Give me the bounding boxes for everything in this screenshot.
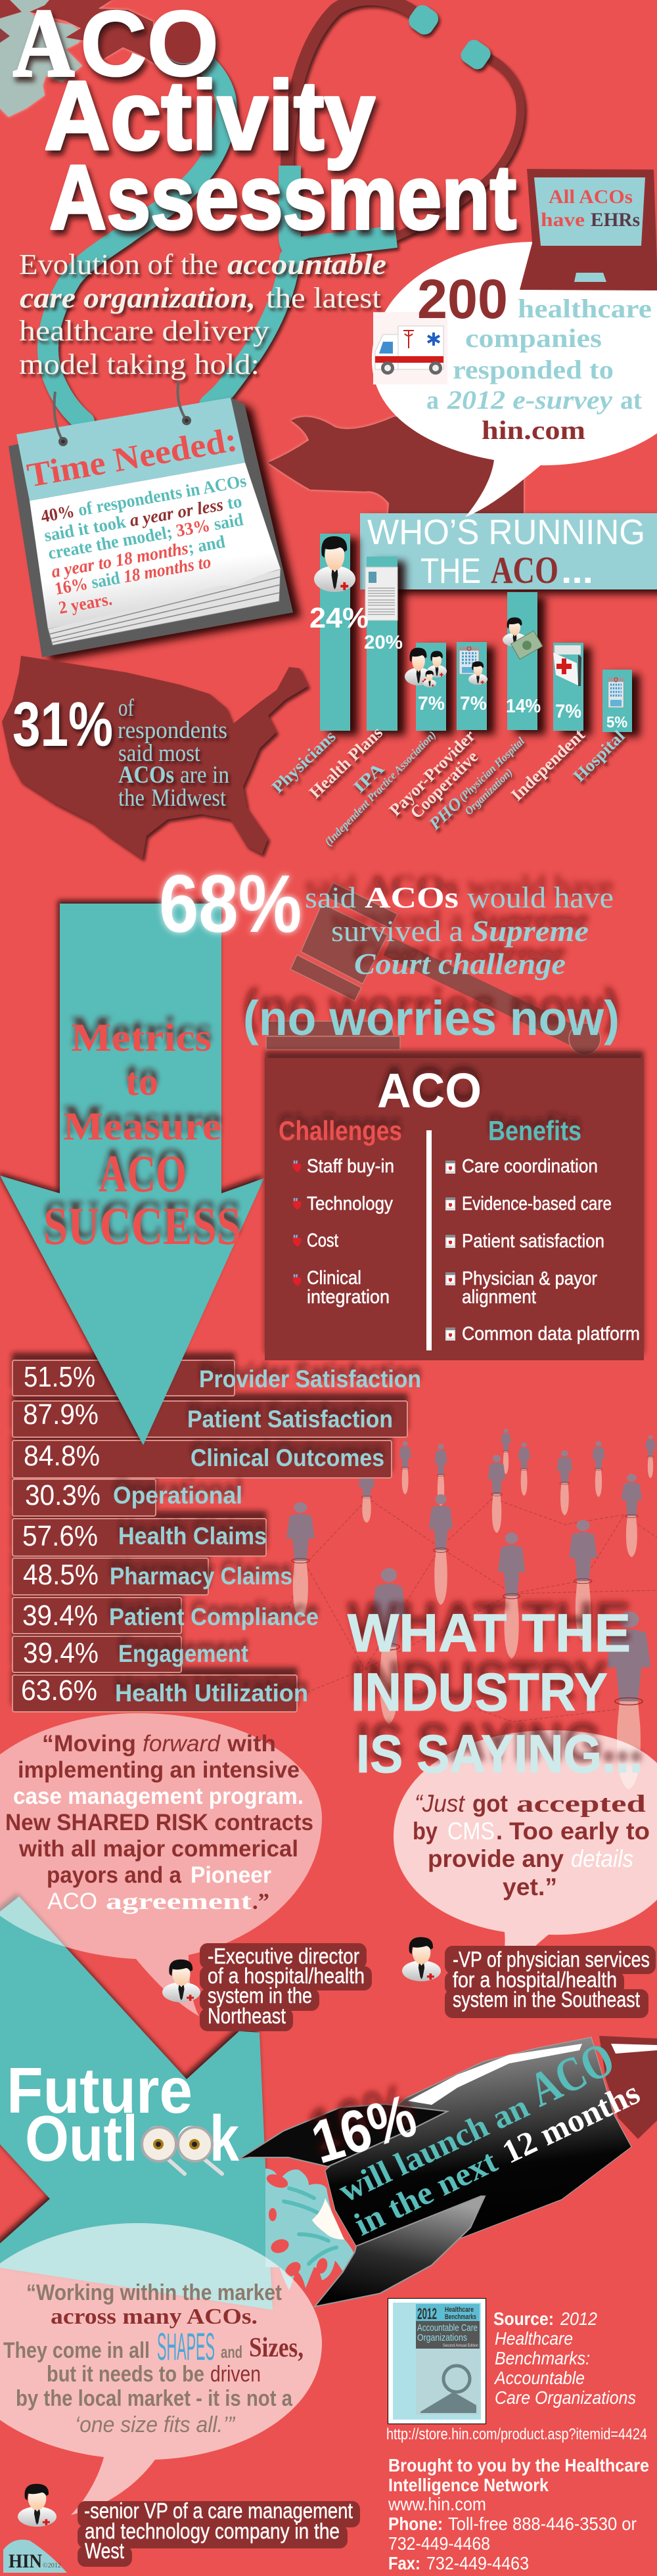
stat text: survived a xyxy=(331,914,463,948)
logo: HIN: ©2012 xyxy=(43,2562,61,2569)
map text: of xyxy=(118,695,135,722)
rocket flame xyxy=(265,2169,355,2290)
contact block: Fax: xyxy=(388,2553,420,2573)
arrow text: Measure xyxy=(63,1105,221,1148)
quote text: “Just xyxy=(415,1790,466,1817)
attribution: VP physician services: for a hospital/health xyxy=(453,1967,617,1992)
arrow text xyxy=(43,1016,241,1256)
quote text: “Working within the market xyxy=(26,2280,282,2305)
laptop: all ACOs have EHRs: All ACOs xyxy=(549,186,633,208)
bar labels: (Independent Practice Association) xyxy=(322,729,438,848)
bubble text: companies xyxy=(465,323,602,353)
report cover: Accountable Care xyxy=(417,2322,478,2334)
title: Assessment xyxy=(49,147,516,248)
arrow text: ACO xyxy=(99,1145,187,1203)
calendar body text: 2 years. xyxy=(57,589,114,618)
icons xyxy=(314,536,623,708)
stethoscope xyxy=(48,0,520,422)
rocket text: 12 months xyxy=(497,2074,645,2171)
source text: Source: xyxy=(493,2309,554,2329)
logo: HIN xyxy=(3,2540,67,2573)
stat text: ACOs xyxy=(365,881,459,914)
laptop: all ACOs have EHRs xyxy=(520,169,657,290)
quote text: ACO xyxy=(47,1889,97,1914)
bar labels xyxy=(268,723,629,848)
percentage values: 5% xyxy=(606,714,627,731)
challenges column: Staff buy-in xyxy=(307,1156,394,1177)
calendar: time needed xyxy=(9,381,293,657)
bar labels: (Physician Hospital xyxy=(457,735,527,804)
future outlook heading: Outl xyxy=(25,2102,138,2174)
map text: said most xyxy=(118,740,201,767)
quote bubble: senior VP xyxy=(0,2223,322,2515)
challenges column: integration xyxy=(307,1287,390,1308)
icon: magnifier eyes xyxy=(142,2127,222,2174)
attribution: senior VP xyxy=(18,2484,360,2567)
quote text: across many ACOs. xyxy=(51,2305,258,2329)
quote bubble: VP physician services xyxy=(394,1730,657,1962)
quote text: Pioneer xyxy=(191,1862,271,1888)
rocket text: 16% xyxy=(304,2082,424,2176)
challenges column: Challenges xyxy=(279,1115,402,1146)
quote text: with all major commerical xyxy=(18,1836,298,1862)
people network xyxy=(283,1429,657,1789)
quote text: . xyxy=(496,1818,503,1845)
metric values and labels: Health Claims xyxy=(118,1523,267,1550)
quote text: details xyxy=(571,1845,633,1872)
subtitle xyxy=(19,248,386,380)
percentage values xyxy=(309,602,627,731)
rocket text: will launch an xyxy=(333,2088,534,2209)
benefits column xyxy=(445,1115,640,1345)
calendar body text: 40% of respondents in ACOs xyxy=(39,471,248,526)
quote text: Sizes, xyxy=(249,2333,304,2363)
bar labels: PHO xyxy=(424,793,466,834)
challenges column: Cost xyxy=(307,1230,338,1251)
map text: are in xyxy=(180,762,229,789)
report cover: Healthcare xyxy=(445,2306,474,2314)
bubble text: healthcare xyxy=(518,294,652,323)
bubble text: 2012 e-survey xyxy=(447,385,612,415)
quote text: “Moving xyxy=(42,1731,136,1757)
nose cone xyxy=(599,2036,657,2139)
quote text: They come in all xyxy=(3,2338,150,2363)
metric values and labels: Provider Satisfaction xyxy=(199,1366,421,1392)
benefits column: Care coordination xyxy=(462,1156,598,1177)
quote text: driven xyxy=(210,2362,261,2387)
metric values and labels: 48.5% xyxy=(23,1559,99,1591)
arrow text: to xyxy=(125,1060,158,1103)
quote text: got xyxy=(472,1790,508,1817)
challenges column xyxy=(279,1115,402,1308)
quote text: Too early to xyxy=(509,1818,650,1845)
metric values and labels: Patient Satisfaction xyxy=(187,1406,393,1433)
challenges column: Clinical xyxy=(307,1268,361,1289)
puzzle piece centre xyxy=(268,417,524,519)
metric values and labels: Health Utilization xyxy=(115,1680,308,1707)
quote text: New SHARED RISK contracts xyxy=(5,1810,313,1835)
laptop: all ACOs have EHRs: EHRs xyxy=(591,209,640,231)
quote text: accepted xyxy=(516,1791,646,1818)
benefits column: Benefits xyxy=(488,1115,581,1146)
subtitle: the latest xyxy=(266,282,381,314)
stat text xyxy=(305,881,614,980)
quote text: yet.” xyxy=(503,1874,557,1900)
contact block: www.hin.com xyxy=(388,2494,486,2514)
heading: what the industry is saying: INDUSTRY xyxy=(351,1663,608,1722)
quote text: case management program. xyxy=(13,1783,304,1809)
rocket xyxy=(238,2032,657,2307)
bubble text: a xyxy=(426,385,439,415)
map text: ACOs xyxy=(118,762,174,789)
attribution: executive director: -Executive director xyxy=(208,1944,359,1968)
attribution: senior VP: West xyxy=(85,2539,124,2563)
stat text: would have xyxy=(467,881,614,914)
subtitle: healthcare delivery xyxy=(19,315,269,347)
report cover: Organizations xyxy=(417,2332,467,2343)
contact block: 732-449-4463 xyxy=(426,2553,529,2573)
bubble text: 200 xyxy=(417,268,508,330)
calendar body text: a year to 18 months; and xyxy=(50,532,227,582)
metric values and labels: 63.6% xyxy=(21,1674,97,1707)
report cover: 2012 xyxy=(417,2305,437,2323)
report cover xyxy=(388,2299,486,2424)
source text xyxy=(493,2309,636,2408)
attribution: executive director xyxy=(162,1943,372,2031)
percentage values: 7% xyxy=(418,693,445,714)
attribution: executive director: Northeast xyxy=(208,2004,286,2028)
quote text xyxy=(5,1731,313,1914)
banner: who's running xyxy=(360,513,657,589)
bar labels: Organization) xyxy=(463,766,515,817)
quote text: agreement xyxy=(106,1889,252,1914)
subtitle: model taking hold: xyxy=(19,348,260,380)
metric values and labels: 57.6% xyxy=(22,1520,98,1552)
source text: Care Organizations xyxy=(495,2387,636,2408)
quote bubble: executive director xyxy=(0,1713,322,2016)
stat text: said xyxy=(305,881,356,914)
quote text xyxy=(413,1790,650,1900)
puzzle pieces top left xyxy=(0,0,154,117)
benefits column: Patient satisfaction xyxy=(462,1231,604,1252)
quote text: but it needs to be xyxy=(47,2362,204,2387)
map text: respondents xyxy=(118,717,227,744)
source text: Accountable xyxy=(493,2368,585,2388)
quote text xyxy=(3,2280,304,2437)
calendar body text: 16% said 18 months to xyxy=(53,552,212,599)
subtitle: Evolution of the xyxy=(19,248,218,281)
metric values and labels: 84.8% xyxy=(24,1440,100,1472)
metric values and labels: 51.5% xyxy=(24,1361,95,1393)
highlight xyxy=(408,2044,582,2105)
bar labels: Cooperative xyxy=(407,747,482,822)
map: United States xyxy=(2,656,308,859)
heading: Time Needed: xyxy=(24,421,240,495)
bar labels: Independent xyxy=(507,725,589,804)
contact block: Phone: xyxy=(388,2514,443,2534)
bar labels: Hospital xyxy=(570,726,629,785)
stat text: Supreme xyxy=(471,914,589,948)
quote text: by the local market - it is not a xyxy=(16,2386,293,2411)
subtitle: accountable xyxy=(227,248,386,281)
contact block: Intelligence Network xyxy=(388,2475,549,2495)
bubble text xyxy=(417,268,652,445)
bar labels: IPA xyxy=(350,758,388,796)
percentage values: 14% xyxy=(506,696,541,717)
metric bars xyxy=(12,1360,407,1712)
arrow: metrics to measure xyxy=(0,904,264,1445)
arrow text: Metrics xyxy=(71,1016,212,1059)
benefits column: Evidence-based care xyxy=(462,1193,612,1214)
quote text: implementing an intensive xyxy=(18,1757,300,1783)
banner heading: ... xyxy=(561,551,593,591)
metric values and labels: Pharmacy Claims xyxy=(110,1563,292,1590)
fins xyxy=(238,2104,447,2167)
metric values and labels: Operational xyxy=(113,1482,242,1509)
future outlook heading: Future xyxy=(7,2054,193,2127)
percentage values: 24% xyxy=(309,602,369,634)
metric values and labels xyxy=(21,1361,421,1707)
banner heading: THE xyxy=(420,551,481,591)
metric values and labels: Engagement xyxy=(118,1640,248,1667)
metric values and labels: 39.4% xyxy=(22,1599,98,1632)
percentage values: 7% xyxy=(555,701,581,722)
future outlook heading xyxy=(7,2054,239,2174)
attribution: senior VP: and technology company in the xyxy=(85,2519,340,2543)
bubble text: hin.com xyxy=(482,415,585,445)
contact block xyxy=(388,2455,649,2573)
metric values and labels: 39.4% xyxy=(23,1637,99,1669)
no worries: (no worries now) xyxy=(243,991,620,1046)
attribution: executive director: of a hospital/health xyxy=(208,1964,365,1988)
map text: Midwest xyxy=(151,785,227,812)
laptop: all ACOs have EHRs: have xyxy=(541,209,585,231)
calendar body text xyxy=(39,471,248,618)
contact block: 732-449-4468 xyxy=(388,2533,490,2554)
attribution: executive director: system in the xyxy=(208,1983,312,2008)
metric values and labels: Clinical Outcomes xyxy=(191,1444,384,1471)
source text: Benchmarks: xyxy=(495,2348,590,2368)
heading: what the industry is saying xyxy=(348,1603,643,1784)
stat text: Court challenge xyxy=(354,947,566,980)
68 percent supreme court stat: 68% xyxy=(159,859,302,950)
quote text: forward xyxy=(143,1731,221,1757)
bubble text: at xyxy=(620,385,643,415)
bubble text: responded to xyxy=(453,355,614,384)
banner heading: ACO xyxy=(491,549,558,591)
rocket text: ACO xyxy=(521,2032,622,2117)
metric values and labels: 87.9% xyxy=(23,1398,99,1431)
rocket text: in the next xyxy=(348,2142,503,2243)
map: United States: 31% xyxy=(12,689,113,760)
future outlook heading: k xyxy=(210,2102,239,2174)
bars xyxy=(320,534,632,732)
banner heading xyxy=(367,513,645,591)
quote text: CMS xyxy=(447,1818,495,1845)
metric values and labels: 30.3% xyxy=(25,1479,101,1511)
bar chart: who's running xyxy=(268,534,632,848)
title: Activity xyxy=(44,60,375,170)
speech bubble: 200 companies xyxy=(372,242,657,517)
quote text: and xyxy=(221,2342,242,2362)
report cover: Second Annual Edition xyxy=(443,2344,478,2348)
map text xyxy=(118,695,229,812)
attribution: senior VP: -senior VP of a care management xyxy=(84,2498,353,2523)
benefits column: alignment xyxy=(462,1287,536,1308)
challenges column: Technology xyxy=(307,1193,393,1214)
bar labels: Health Plans xyxy=(306,723,386,802)
percentage values: 7% xyxy=(460,693,487,714)
benefits column: Common data platform xyxy=(462,1323,640,1345)
quote text: ‘one size fits all.’” xyxy=(75,2412,236,2437)
title xyxy=(13,0,516,248)
contact block: Toll-free 888-446-3530 or xyxy=(448,2514,637,2534)
arrow text: SUCCESS xyxy=(43,1196,241,1256)
benefits column: Physician & payor xyxy=(462,1268,597,1289)
subtitle: care organization, xyxy=(20,282,256,314)
quote text: .” xyxy=(252,1889,269,1914)
source text: Healthcare xyxy=(495,2328,573,2349)
68 percent supreme court stat xyxy=(159,859,620,1046)
banner heading: WHO’S RUNNING xyxy=(367,513,645,552)
attribution: VP physician services xyxy=(402,1937,656,2018)
icon: ambulance xyxy=(373,312,447,384)
teal star: future outlook xyxy=(0,1897,273,2310)
quote text: with xyxy=(227,1731,276,1757)
rocket text xyxy=(304,2032,645,2243)
metric values and labels: Patient Compliance xyxy=(109,1603,319,1630)
calendar body text: create the model; 33% said xyxy=(47,509,244,563)
quote text: payors and a xyxy=(47,1862,181,1888)
panel: ACO challenges and benefits xyxy=(265,1058,644,1360)
earpieces xyxy=(405,1,493,72)
quote text: provide any xyxy=(428,1845,564,1872)
panel: ACO challenges and benefits: ACO xyxy=(377,1063,482,1118)
report cover: Benchmarks xyxy=(445,2313,476,2321)
divider xyxy=(426,1130,432,1350)
rings xyxy=(54,381,190,445)
icon: gavel xyxy=(266,883,600,1055)
source text: 2012 xyxy=(560,2309,597,2329)
bar labels: Physicians xyxy=(268,727,340,796)
bar labels: Payor-Provider xyxy=(386,726,479,819)
heading: what the industry is saying: WHAT THE xyxy=(348,1603,631,1663)
future outlook heading: oo xyxy=(141,2102,209,2174)
logo: HIN: HIN xyxy=(9,2550,42,2572)
percentage values: 20% xyxy=(364,632,403,653)
calendar body text: said it took a year or less to xyxy=(43,491,243,545)
quote text: SHAPES xyxy=(157,2326,215,2368)
map text: the xyxy=(118,785,145,812)
quote text: by xyxy=(413,1818,438,1845)
